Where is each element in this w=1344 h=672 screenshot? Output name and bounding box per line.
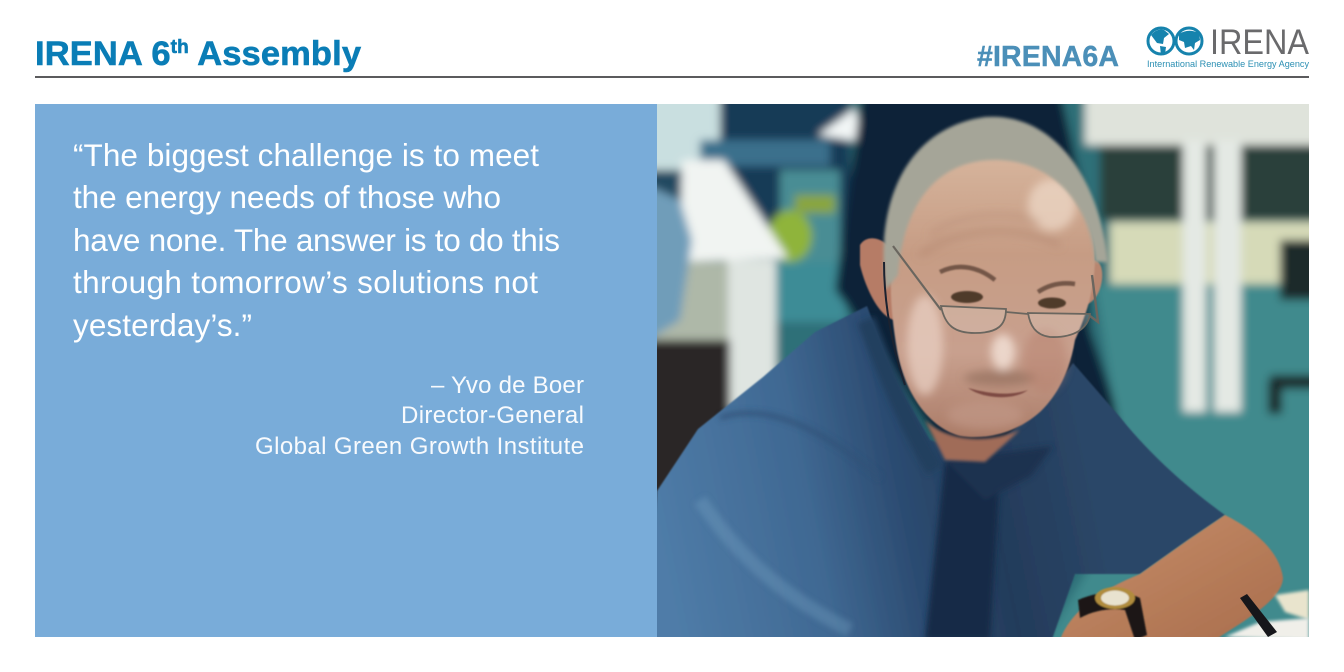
title: Assembly bbox=[189, 35, 361, 73]
watch bbox=[1078, 587, 1147, 640]
quote background bbox=[35, 104, 657, 637]
quote text: yesterday’s.” bbox=[73, 307, 252, 343]
attribution bbox=[255, 372, 584, 460]
right ear bbox=[1088, 260, 1104, 304]
panel: quote bbox=[35, 104, 657, 637]
logo wordmark: IRENA bbox=[1210, 23, 1310, 62]
attribution: Global Green Growth Institute bbox=[255, 433, 584, 460]
eyebrows bbox=[940, 267, 1075, 292]
logo: IRENA bbox=[1147, 23, 1310, 69]
office background bbox=[657, 104, 1309, 637]
shirt shadows and folds bbox=[700, 320, 1053, 640]
title: th bbox=[171, 37, 189, 58]
title: IRENA 6 bbox=[35, 35, 171, 73]
forearm bbox=[1060, 515, 1283, 640]
photo: man at desk bbox=[657, 104, 1309, 637]
quote text: have none. The answer is to do this bbox=[73, 222, 560, 258]
quote text: the energy needs of those who bbox=[73, 179, 501, 215]
neck bbox=[925, 420, 1020, 462]
attribution: Director-General bbox=[401, 402, 584, 429]
eyes bbox=[951, 291, 1066, 308]
logo tagline: International Renewable Energy Agency bbox=[1147, 59, 1309, 69]
quote text: through tomorrow’s solutions not bbox=[73, 264, 538, 300]
face bbox=[891, 155, 1095, 437]
hashtag: #IRENA6A bbox=[977, 41, 1119, 73]
attribution: – Yvo de Boer bbox=[431, 372, 584, 399]
mouth bbox=[968, 388, 1028, 397]
icon: twin globes bbox=[1148, 28, 1202, 55]
desk items and pen bbox=[1225, 590, 1309, 640]
quote text: “The biggest challenge is to meet bbox=[73, 137, 539, 173]
quote text bbox=[73, 137, 560, 343]
header rule bbox=[35, 76, 1309, 78]
face shading bbox=[907, 179, 1076, 429]
left ear bbox=[860, 238, 898, 320]
glasses bbox=[884, 246, 1098, 385]
hair bbox=[884, 117, 1108, 290]
shirt bbox=[650, 306, 1225, 645]
